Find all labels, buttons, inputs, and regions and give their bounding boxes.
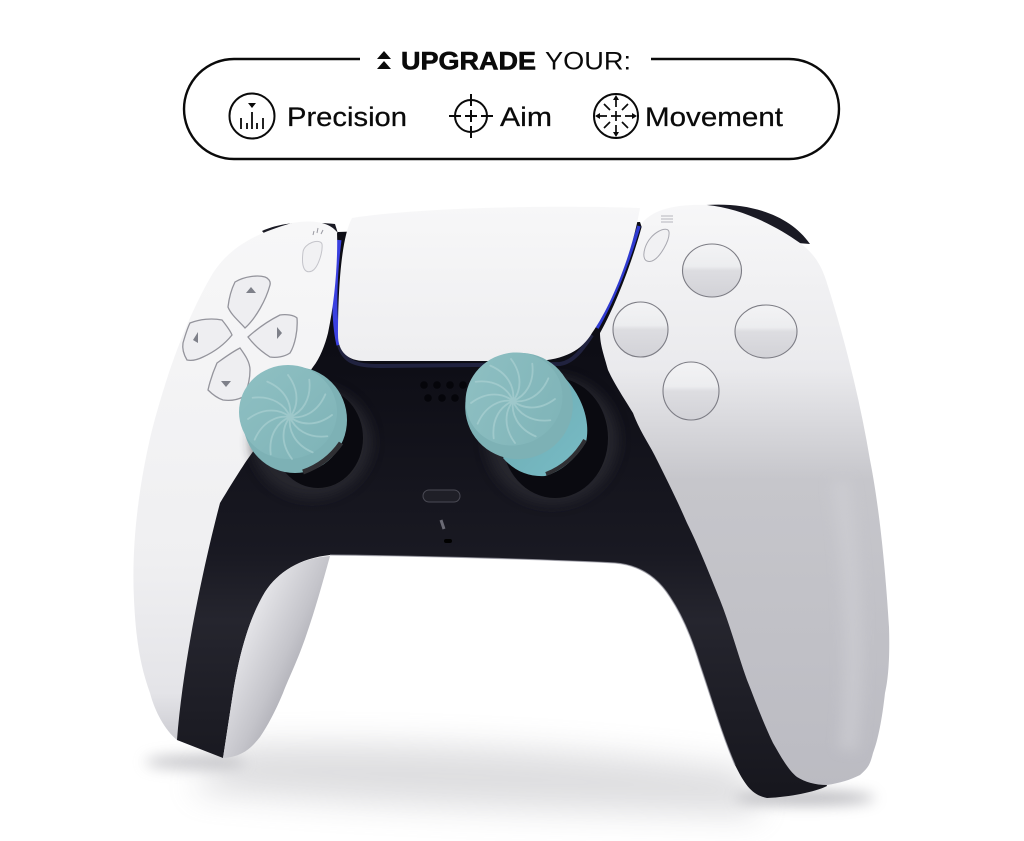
button square bbox=[613, 302, 668, 357]
d-pad right bbox=[248, 315, 297, 357]
cap face bbox=[450, 337, 578, 461]
button circle bbox=[735, 305, 797, 358]
right stick well bbox=[486, 376, 618, 504]
black centre housing bbox=[165, 222, 827, 798]
grip band bbox=[303, 443, 341, 472]
create button bbox=[302, 241, 322, 272]
icon: aim crosshair bbox=[449, 94, 493, 138]
left thumbstick bbox=[239, 365, 347, 473]
underside highlight bbox=[330, 555, 735, 765]
right grip white bbox=[600, 205, 889, 785]
stem bbox=[503, 378, 587, 476]
label: precision: Precision bbox=[287, 102, 407, 132]
swirl bbox=[248, 375, 332, 459]
create lines bbox=[313, 228, 323, 235]
heading: YOUR: bbox=[545, 48, 631, 76]
icon: movement bbox=[594, 94, 638, 138]
heading: UPGRADE bbox=[401, 48, 536, 76]
speaker holes bbox=[420, 381, 467, 402]
label: movement: Movement bbox=[645, 102, 784, 132]
options lines bbox=[661, 216, 673, 222]
left stick base bbox=[273, 388, 363, 488]
right thumbstick bbox=[448, 335, 590, 477]
d-pad up bbox=[228, 276, 270, 328]
right grip highlight bbox=[840, 480, 853, 750]
d-pad bbox=[183, 276, 297, 400]
touchpad bbox=[338, 207, 640, 361]
blue light bar right bbox=[597, 226, 639, 328]
dark light bar lower bbox=[339, 335, 592, 366]
face buttons bbox=[613, 244, 797, 420]
grip band bbox=[546, 440, 585, 474]
cap rim bbox=[243, 367, 347, 473]
mute button bbox=[423, 490, 460, 502]
mic hole bbox=[444, 539, 452, 543]
ground shadow bbox=[145, 744, 875, 815]
label: aim: Aim bbox=[500, 102, 552, 132]
blue light bar left bbox=[335, 240, 339, 345]
mic mark bbox=[441, 520, 444, 529]
options button bbox=[644, 229, 669, 261]
left grip white bbox=[133, 222, 337, 740]
badge outline bbox=[184, 59, 839, 159]
rear bumpers bbox=[262, 205, 810, 244]
icon: double chevron up bbox=[377, 51, 391, 69]
button triangle bbox=[682, 244, 742, 297]
d-pad left bbox=[183, 319, 232, 360]
badge: upgrade your bbox=[184, 48, 839, 159]
right stick base bbox=[502, 378, 608, 498]
d-pad arrows bbox=[193, 287, 282, 387]
icon: precision bbox=[230, 94, 274, 138]
d-pad down bbox=[208, 348, 250, 400]
button cross bbox=[663, 362, 719, 420]
left stick well bbox=[252, 386, 372, 498]
swirl bbox=[471, 359, 555, 443]
cap face bbox=[239, 365, 337, 459]
cap rim bbox=[448, 335, 590, 477]
controller bbox=[133, 205, 889, 815]
left lower grip panel bbox=[223, 556, 330, 758]
